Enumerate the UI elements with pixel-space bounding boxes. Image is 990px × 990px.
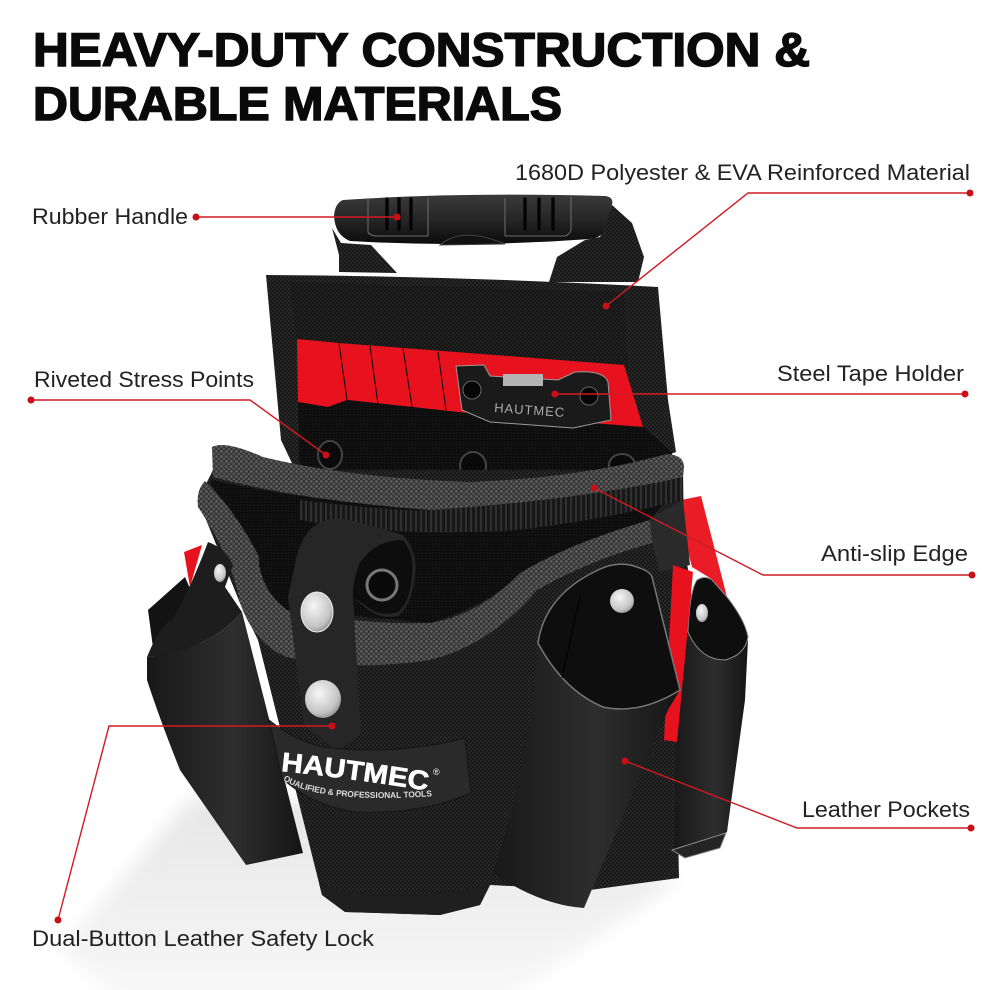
brand patch: ® xyxy=(433,767,440,777)
callout: Leather Pockets xyxy=(622,758,974,832)
back panel xyxy=(266,275,676,480)
callout: Anti-slip Edge: Anti-slip Edge xyxy=(821,541,968,566)
ribbed band under rim xyxy=(300,477,683,532)
callout: Dual-Button Leather Safety Lock: Dual-Button Leather Safety Lock xyxy=(32,926,375,951)
leather pocket left xyxy=(147,542,303,865)
callout: Leather Pockets: Leather Pockets xyxy=(802,797,970,822)
callout: Anti-slip Edge xyxy=(590,484,976,578)
rubber handle xyxy=(334,195,612,245)
front pocket webbing xyxy=(198,481,652,665)
pocket base xyxy=(319,883,490,915)
callout: Steel Tape Holder xyxy=(552,361,968,398)
title xyxy=(33,23,810,130)
red side band xyxy=(681,496,727,597)
handle straps xyxy=(332,205,644,282)
callout: Riveted Stress Points xyxy=(28,367,330,458)
brand patch: HAUTMEC xyxy=(282,752,429,790)
steel tape holder xyxy=(456,365,611,428)
callout: Steel Tape Holder: Steel Tape Holder xyxy=(777,361,964,386)
product: tool pouch xyxy=(147,194,748,915)
callout: Rubber Handle: Rubber Handle xyxy=(32,204,188,229)
callout: Riveted Stress Points: Riveted Stress Points xyxy=(34,367,254,392)
panel inner fabric xyxy=(290,282,628,370)
anti-slip rim xyxy=(212,445,684,510)
callout: Dual-Button Leather Safety Lock xyxy=(32,722,375,951)
callout: 1680D Polyester: 1680D Polyester & EVA Reinforced Material xyxy=(515,160,970,185)
callout: Rubber Handle xyxy=(32,204,400,229)
title: DURABLE MATERIALS xyxy=(33,77,562,130)
right side gusset xyxy=(650,500,690,572)
lower dark interior xyxy=(298,400,672,482)
leather safety strap xyxy=(288,519,416,748)
leather pocket right xyxy=(664,565,748,858)
pouch main body xyxy=(198,470,692,915)
brand patch: QUALIFIED & PROFESSIONAL TOOLS xyxy=(284,776,432,798)
title: HEAVY-DUTY CONSTRUCTION & xyxy=(33,23,810,76)
ground shadow xyxy=(60,800,680,990)
pouch interior fabric xyxy=(210,480,683,623)
rivets xyxy=(318,441,635,480)
red side strap xyxy=(664,565,693,742)
brand patch xyxy=(268,719,472,813)
leather pocket large xyxy=(493,564,680,908)
steel tape holder: HAUTMEC xyxy=(494,400,565,420)
callout: 1680D Polyester xyxy=(515,160,974,310)
red tool strip xyxy=(297,339,643,427)
